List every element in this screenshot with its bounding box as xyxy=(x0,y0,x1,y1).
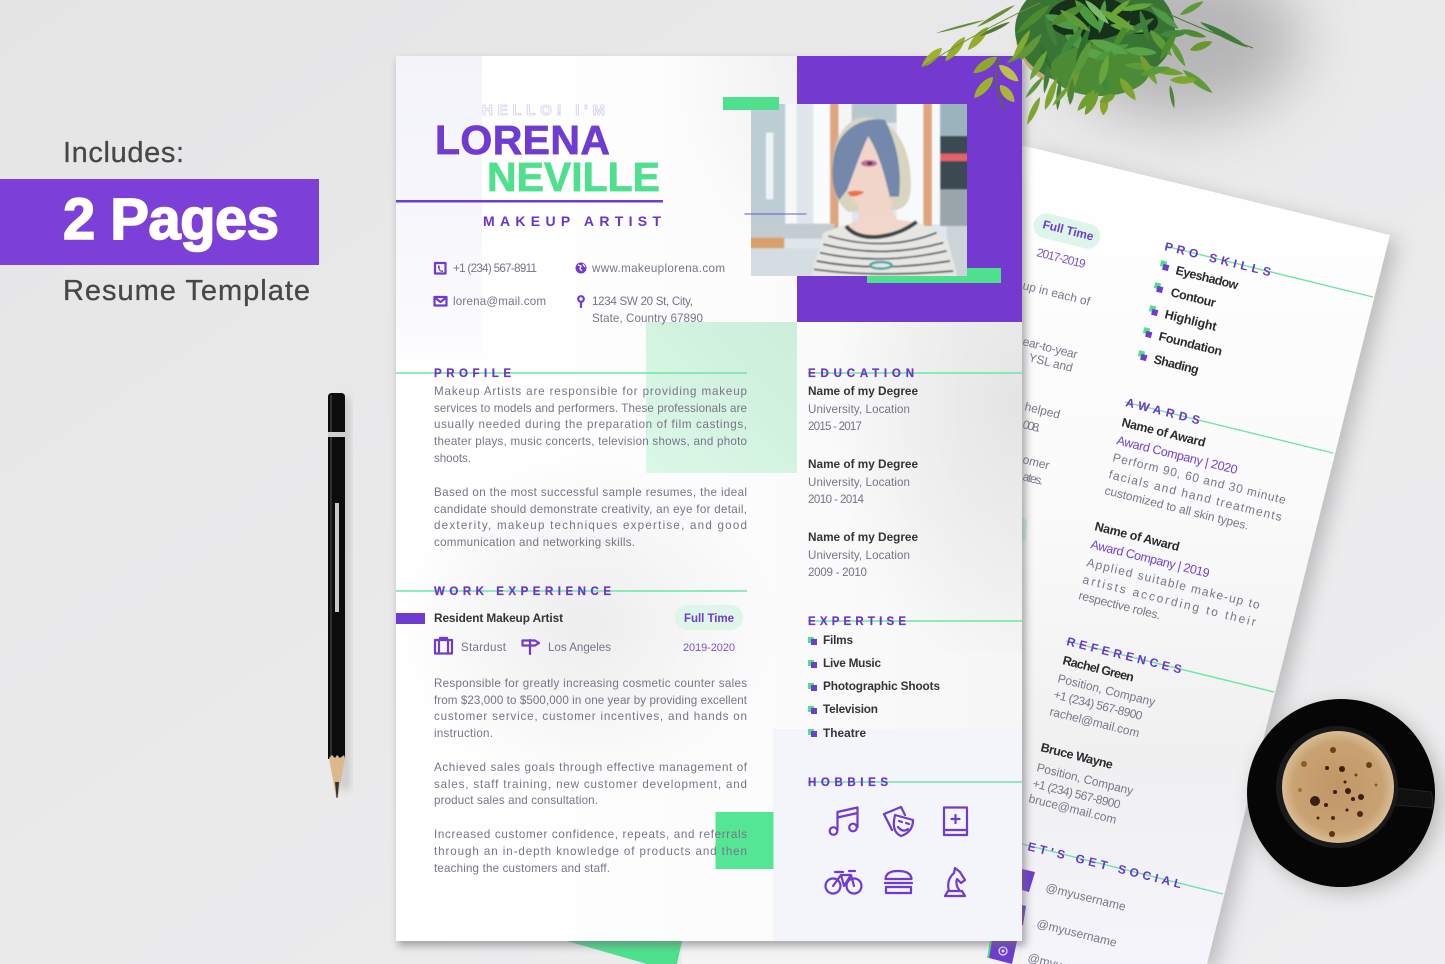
section: expertise xyxy=(808,616,1022,740)
section: awards: customized to all skin types. xyxy=(1103,483,1250,533)
shadow of the plant xyxy=(1060,0,1300,120)
section: awards: Applied suitable make-up to xyxy=(1085,555,1262,612)
section: expertise: Theatre xyxy=(823,726,866,740)
section: education xyxy=(808,368,1022,579)
back page employment fragment: up in each of xyxy=(1021,278,1092,309)
section: awards: Award Company | 2019 xyxy=(1089,537,1211,580)
section: references: Rachel Green xyxy=(1061,653,1135,685)
section: pro skills: Contour xyxy=(1169,285,1217,310)
back page employment fragment: ear-to-year xyxy=(1021,334,1079,361)
section: work experience: through an in-depth knowledge of products and then xyxy=(434,845,747,858)
section: expertise: Live Music xyxy=(823,656,881,670)
back page employment fragment: 2017-2019 xyxy=(1035,245,1087,271)
icon: signpost xyxy=(522,640,539,654)
section: references: Position, Company xyxy=(1056,671,1157,709)
banner: 2 pages: 2 Pages xyxy=(63,187,279,252)
section: profile: Makeup Artists are responsible for providing makeup xyxy=(434,385,747,398)
section: expertise: Films xyxy=(823,633,853,647)
icon: chess knight xyxy=(945,868,965,896)
contact details: +1 (234) 567-8911 xyxy=(453,262,537,275)
back page employment fragment: YSL and xyxy=(1027,350,1074,375)
section: work experience: instruction. xyxy=(434,727,493,740)
section: awards: AWARDS xyxy=(1124,395,1201,427)
icon: map pin xyxy=(578,296,584,307)
coffee cup xyxy=(1247,699,1441,892)
section: awards: Perform 90, 60 and 30 minute xyxy=(1111,450,1288,507)
panel: back resume page xyxy=(567,140,1390,964)
section: work experience: sales, staff training, new customer development, and xyxy=(434,778,747,791)
section: education: University, Location xyxy=(808,549,910,562)
back page employment fragment: ates. xyxy=(1021,469,1045,488)
section: work experience: teaching the customers and staff. xyxy=(434,862,610,875)
section: awards: Name of Award xyxy=(1120,415,1207,450)
section: awards: Award Company | 2020 xyxy=(1115,433,1239,477)
section: education: EDUCATION xyxy=(808,368,914,380)
back page employment fragment xyxy=(1021,211,1103,488)
section: education: 2010 - 2014 xyxy=(808,493,865,506)
purple header block xyxy=(797,56,1022,322)
back page lower strip xyxy=(682,941,1022,964)
section: profile: candidate should demonstrate creativity, an eye for detail, xyxy=(434,503,747,516)
header: last name: NEVILLE xyxy=(487,154,660,200)
green block behind work text xyxy=(716,812,774,869)
section: profile: PROFILE xyxy=(434,368,511,380)
icon: globe xyxy=(576,262,586,274)
pencil xyxy=(328,393,350,798)
section: pro skills: Foundation xyxy=(1157,329,1224,359)
section: let's get social xyxy=(1022,839,1223,964)
section: expertise: EXPERTISE xyxy=(808,616,906,628)
section: awards: facials and hand treatments xyxy=(1107,467,1283,524)
section: profile: communication and networking skills. xyxy=(434,536,635,549)
section: work experience: Los Angeles xyxy=(548,641,611,654)
back page employment fragment: 008. xyxy=(1021,417,1042,435)
header: hello: HELLO! I'M xyxy=(482,102,605,119)
thin line over photo xyxy=(744,214,806,215)
section: education: 2009 - 2010 xyxy=(808,566,867,579)
section: pro skills: Highlight xyxy=(1163,307,1219,334)
header: job title: MAKEUP ARTIST xyxy=(483,213,661,229)
section: work experience: from $23,000 to $500,000 in one year by providing excellent xyxy=(434,694,748,707)
section: references xyxy=(1027,634,1274,827)
contact details: State, Country 67890 xyxy=(592,312,703,325)
section: profile: usually needed during the preparation of film castings, xyxy=(434,418,747,431)
contact details xyxy=(434,262,725,325)
section: let's get social: @myusername xyxy=(1044,880,1128,914)
section: profile: services to models and performers. These professionals are xyxy=(434,402,747,415)
front page shadow xyxy=(398,60,1026,946)
subheading: resume template: Resume Template xyxy=(63,275,310,307)
section: work experience: 2019-2020 xyxy=(683,642,735,654)
section: references: +1 (234) 567-8900 xyxy=(1031,776,1122,812)
section: work experience xyxy=(396,586,748,875)
header: first name: LORENA xyxy=(435,117,610,163)
section: pro skills: Eyeshadow xyxy=(1174,263,1240,292)
section: profile: Based on the most successful sample resumes, the ideal xyxy=(434,486,747,499)
contact details: www.makeuplorena.com xyxy=(591,262,725,275)
section: references: +1 (234) 567-8900 xyxy=(1052,687,1144,723)
icon: instagram square xyxy=(987,941,1017,964)
section: references: Position, Company xyxy=(1035,760,1135,798)
section: profile: dexterity, makeup techniques expertise, and good xyxy=(434,519,747,532)
section: work experience: Increased customer confidence, repeats, and referrals xyxy=(434,828,747,841)
section: let's get social: ET'S GET SOCIAL xyxy=(1026,839,1183,891)
section: work experience: Achieved sales goals through effective management of xyxy=(434,761,748,774)
back page green block xyxy=(567,941,682,964)
section: work experience: WORK EXPERIENCE xyxy=(434,586,611,598)
section: work experience: Responsible for greatly increasing cosmetic counter sales xyxy=(434,677,747,690)
banner: 2 pages xyxy=(0,179,319,265)
section: education: Name of my Degree xyxy=(808,457,918,471)
section: awards xyxy=(1077,395,1333,629)
back page employment fragment: helped xyxy=(1023,399,1062,422)
section: profile: shoots. xyxy=(434,452,471,465)
section: expertise: Photographic Shoots xyxy=(823,679,940,693)
section: pro skills: Shading xyxy=(1152,352,1200,377)
contact details: 1234 SW 20 St, City, xyxy=(592,295,693,308)
icon: briefcase xyxy=(435,638,452,654)
section: references: rachel@mail.com xyxy=(1048,704,1141,740)
section: education: University, Location xyxy=(808,403,910,416)
header rule xyxy=(396,200,663,202)
green bar over photo xyxy=(723,97,779,110)
back page employment fragment: Full Time xyxy=(1041,217,1095,244)
section: awards: respective roles. xyxy=(1077,588,1162,622)
section: work experience: product sales and consultation. xyxy=(434,794,598,807)
icon: music xyxy=(830,808,858,835)
green bar under photo xyxy=(867,268,1001,283)
back page shadow xyxy=(1030,152,1398,964)
section: references: bruce@mail.com xyxy=(1027,791,1118,827)
contact details: lorena@mail.com xyxy=(453,295,546,308)
icon: phone xyxy=(435,263,446,274)
section: profile xyxy=(396,368,747,549)
heading: includes: Includes: xyxy=(63,137,184,169)
section: awards: artists according to their xyxy=(1081,572,1257,629)
icon: theatre masks xyxy=(884,807,913,836)
section: work experience: customer service, customer incentives, and hands on xyxy=(434,710,747,723)
icon: burger xyxy=(885,871,912,893)
section: references: REFERENCES xyxy=(1065,634,1183,676)
section: let's get social: @myusername xyxy=(1035,916,1119,950)
section: hobbies: HOBBIES xyxy=(808,777,888,789)
pill: full time: Full Time xyxy=(684,613,734,625)
section: hobbies xyxy=(808,777,1022,896)
section: expertise: Television xyxy=(823,702,878,716)
section: education: Name of my Degree xyxy=(808,530,918,544)
section: work experience: Stardust xyxy=(461,641,507,654)
section: profile: theater plays, music concerts, television shows, and photo xyxy=(434,435,747,448)
icon: mail xyxy=(434,297,446,306)
section: education: University, Location xyxy=(808,476,910,489)
section: education: Name of my Degree xyxy=(808,384,918,398)
job marker xyxy=(396,613,425,624)
section: awards: Name of Award xyxy=(1093,519,1181,554)
back page employment fragment: omer xyxy=(1021,452,1051,472)
panel: front resume page xyxy=(396,56,1022,941)
icon: bicycle xyxy=(826,871,862,894)
portrait photo xyxy=(747,99,973,281)
potted plant xyxy=(919,0,1253,126)
section: education: 2015 - 2017 xyxy=(808,420,862,433)
section: pro skills: PRO SKILLS xyxy=(1163,239,1272,279)
pill: full time xyxy=(675,605,743,630)
section: work experience: Resident Makeup Artist xyxy=(434,611,563,625)
section: references: Bruce Wayne xyxy=(1039,740,1115,772)
icon: book xyxy=(944,808,967,835)
section: pro skills xyxy=(1137,239,1373,377)
mint block behind profile xyxy=(646,322,797,473)
